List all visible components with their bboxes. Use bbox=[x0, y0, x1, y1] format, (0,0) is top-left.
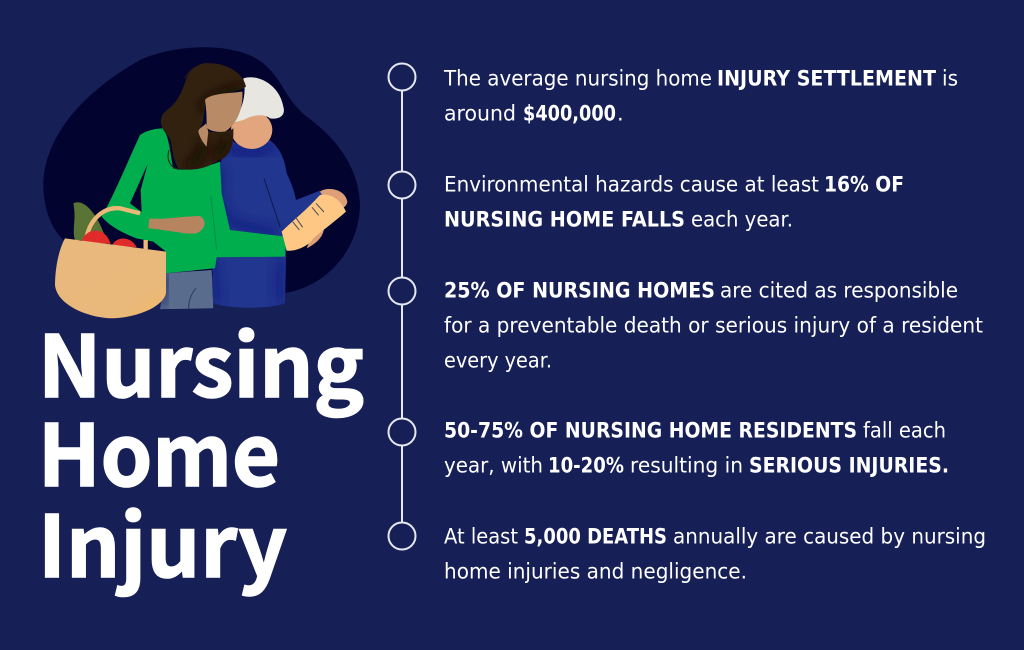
arm gap bbox=[130, 164, 148, 212]
fact 1: The average nursing home bbox=[443, 66, 712, 90]
trousers bbox=[160, 270, 214, 310]
hair shading bbox=[187, 88, 243, 165]
younger woman face bbox=[205, 92, 242, 132]
dark blob backdrop bbox=[43, 47, 360, 293]
sweater fold line bbox=[211, 197, 217, 250]
fact 1: $400,000 bbox=[523, 101, 616, 125]
fact 4: 50-75% OF NURSING HOME RESIDENTS bbox=[444, 418, 857, 442]
fact 2: NURSING HOME FALLS bbox=[444, 207, 685, 231]
fact 1: is bbox=[942, 66, 958, 90]
basket bbox=[55, 238, 166, 318]
fact 5: annually are caused by nursing bbox=[673, 524, 986, 548]
leaves bbox=[73, 202, 106, 240]
paper bbox=[282, 195, 346, 251]
fact 5: At least bbox=[444, 524, 518, 548]
hands holding paper bbox=[307, 189, 347, 248]
basket handle bbox=[86, 208, 146, 249]
fact 3: 25% OF NURSING HOMES bbox=[444, 278, 715, 302]
fact 4: SERIOUS INJURIES. bbox=[749, 453, 949, 477]
younger woman hair bbox=[161, 63, 246, 170]
younger woman neck bbox=[198, 123, 208, 147]
fact 3: for a preventable death or serious injury of a resident bbox=[444, 313, 983, 337]
fact 4: fall each bbox=[863, 418, 946, 442]
fact 2 bbox=[444, 172, 904, 231]
fact 2: 16% OF bbox=[824, 172, 904, 196]
fact 4: resulting in bbox=[630, 453, 743, 477]
title bbox=[38, 299, 364, 602]
fact 1: . bbox=[617, 101, 624, 125]
fact 5: 5,000 DEATHS bbox=[524, 524, 667, 548]
fact 4: year, with bbox=[444, 453, 543, 477]
timeline bbox=[388, 64, 416, 550]
older woman white hair bbox=[234, 77, 284, 122]
fact 2: each year. bbox=[691, 207, 793, 231]
fact 5 bbox=[444, 524, 986, 583]
fact 5: home injuries and negligence. bbox=[444, 559, 747, 583]
fact 1: INJURY SETTLEMENT bbox=[717, 66, 937, 90]
fact 3: every year. bbox=[444, 348, 552, 372]
fact 4: 10-20% bbox=[548, 453, 624, 477]
forearm and hand bbox=[148, 216, 205, 234]
fact 3: are cited as responsible bbox=[720, 278, 958, 302]
title: Injury bbox=[38, 479, 287, 602]
title: Nursing bbox=[38, 299, 364, 422]
hair flyaway strands bbox=[161, 63, 207, 169]
title: Home bbox=[38, 388, 280, 511]
older woman sweater bbox=[210, 137, 327, 310]
illustration: two women reading a paper bbox=[43, 47, 360, 318]
fact 1 bbox=[443, 66, 958, 125]
fact 2: Environmental hazards cause at least bbox=[444, 172, 819, 196]
apples bbox=[82, 231, 137, 247]
fact 4 bbox=[444, 418, 949, 477]
fact 3 bbox=[444, 278, 983, 372]
younger woman green sweater bbox=[102, 128, 286, 273]
older woman head bbox=[231, 111, 272, 149]
older woman sweater fold bbox=[264, 178, 280, 227]
paper writing bbox=[293, 203, 324, 230]
fact 1: around bbox=[444, 101, 516, 125]
